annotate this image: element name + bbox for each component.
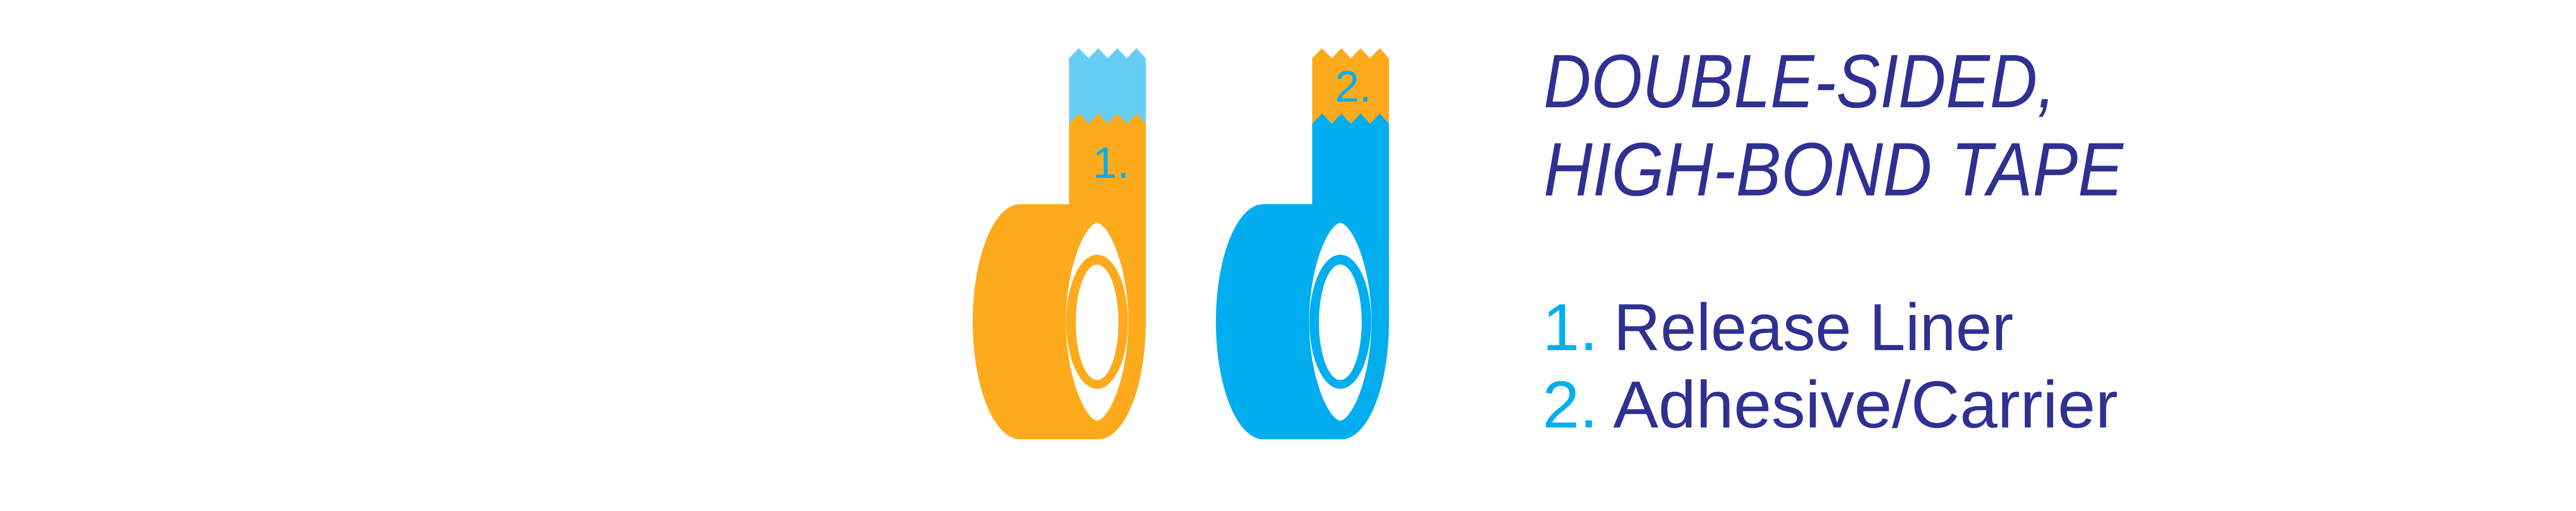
number label 2: 2. (1335, 62, 1371, 111)
core hole (1076, 265, 1118, 380)
core ring (1310, 255, 1371, 389)
number label 1: 1. (1093, 139, 1129, 188)
title (1544, 39, 2124, 212)
legend item: release liner: 1. (1543, 290, 1598, 365)
title: HIGH-BOND TAPE (1544, 127, 2124, 212)
title: DOUBLE-SIDED, (1544, 39, 2056, 124)
legend item: release liner: Release Liner (1614, 290, 2013, 365)
roll body (973, 113, 1146, 439)
liner strip end (1069, 48, 1146, 126)
legend item: adhesive/carrier: Adhesive/Carrier (1613, 368, 2118, 442)
icon: blue tape roll with orange adhesive (1216, 48, 1389, 439)
core hole (1319, 265, 1362, 380)
roll opening (1066, 223, 1128, 421)
icon: orange tape roll with light blue liner (973, 48, 1146, 439)
legend (1543, 290, 2118, 442)
legend item: adhesive/carrier: 2. (1543, 368, 1598, 442)
core ring (1066, 255, 1128, 389)
adhesive strip end (1312, 48, 1389, 126)
roll body (1216, 113, 1389, 439)
roll opening (1309, 223, 1371, 421)
